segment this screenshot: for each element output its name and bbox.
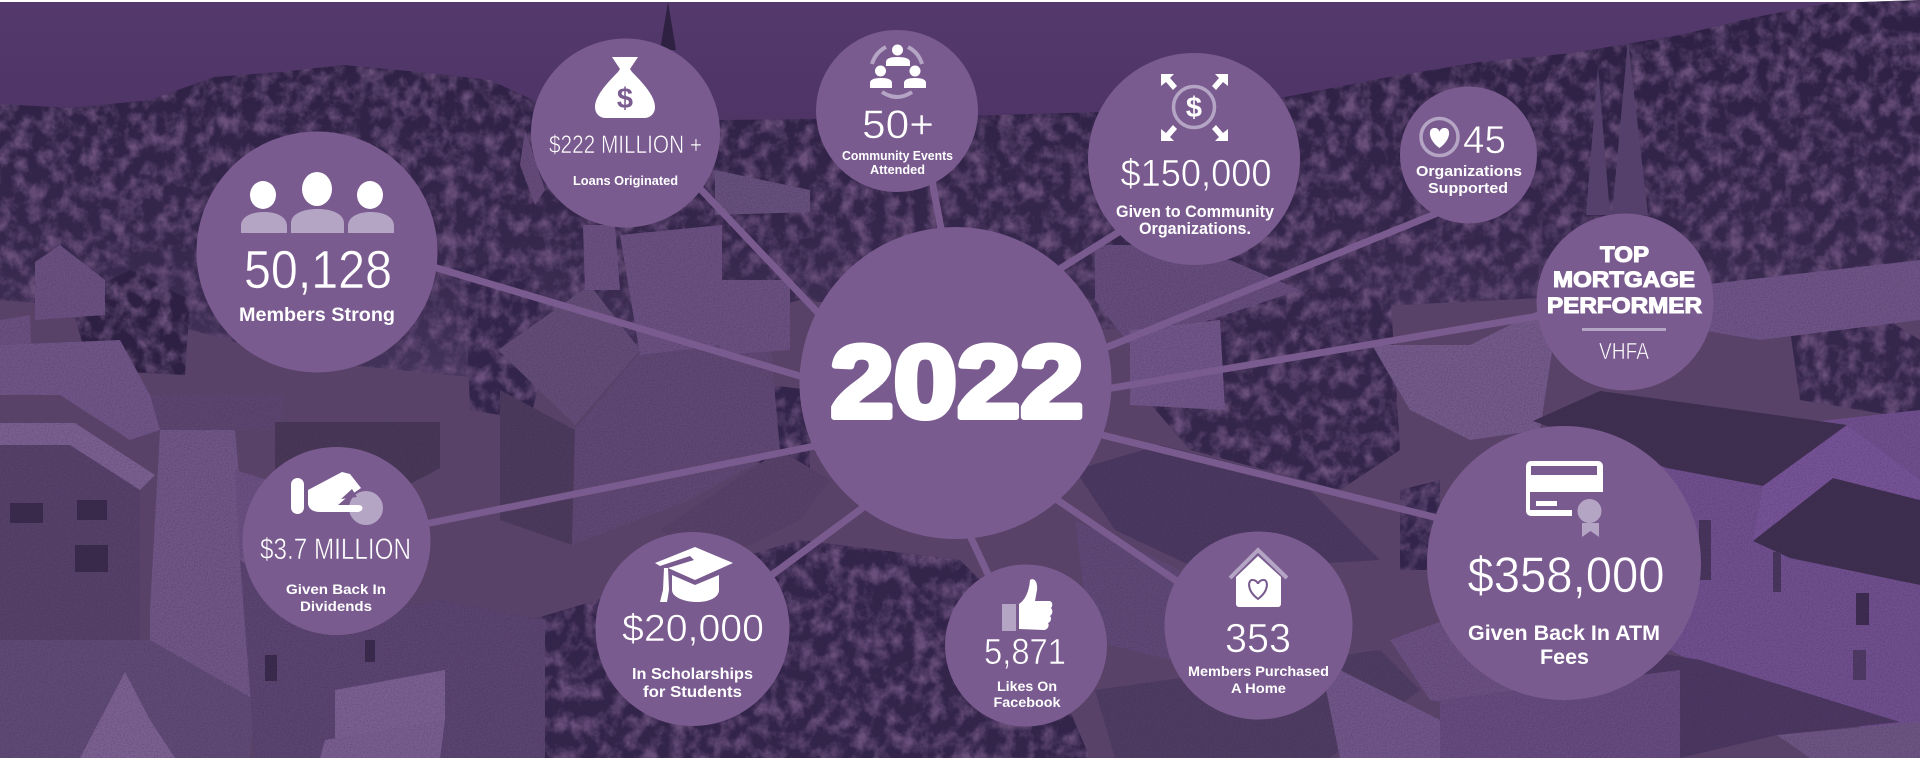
stat: given back in ATM fees [1427,426,1701,700]
icon: dollar with arrows: $ [1186,92,1202,124]
icon: heart ring [1421,118,1458,156]
stat: loans originated: Loans Originated [573,173,678,188]
stat: top mortgage performer: VHFA [1599,338,1650,364]
center circle: 2022 [800,227,1112,539]
stat: community events: Community Events [842,148,953,163]
stat: given back in ATM fees: Fees [1540,645,1589,669]
right spires [1586,67,1610,215]
stat: organizations supported: Supported [1428,180,1508,197]
stat: likes on facebook [945,564,1107,726]
center circle: 2022: 2022 [830,325,1084,439]
center right buildings [1075,245,1920,758]
stat: community events [816,30,978,192]
stat: given to community: $150,000 [1120,153,1272,195]
icon: community group [870,44,926,97]
icon: money bag [595,57,655,118]
stat: loans originated: $222 MILLION + [549,131,702,159]
icon: money bag: $ [617,83,633,115]
stat: dividends [242,447,430,635]
icon: house with heart [1230,550,1287,607]
stat: organizations supported: Organizations [1416,163,1522,180]
stat: given to community: Given to Community [1116,203,1275,221]
stat: likes on facebook: Likes On [997,678,1057,694]
icon: graduation cap [655,547,733,602]
stat: given back in ATM fees: $358,000 [1468,547,1664,603]
stat: likes on facebook: 5,871 [984,631,1066,672]
stat: members strong [196,132,438,372]
stat: given back in ATM fees: Given Back In ATM [1468,621,1660,645]
distant steeple [660,2,676,50]
stat: members purchased a home: A Home [1231,680,1286,696]
left buildings [0,245,545,758]
stat: top mortgage performer: PERFORMER [1547,293,1702,318]
stat: members strong: 50,128 [244,240,392,300]
stat: top mortgage performer [1536,214,1714,390]
stat: community events: Attended [870,162,925,177]
stat: scholarships: $20,000 [622,608,764,650]
connector lines [415,170,1550,590]
stat: scholarships: In Scholarships [632,666,753,683]
stat: members purchased a home: 353 [1225,615,1291,661]
stat: members strong: Members Strong [239,305,395,326]
stat: given to community [1088,53,1300,265]
icon: hand and coin [291,472,383,525]
stat: members purchased a home [1164,532,1352,720]
stat: scholarships: for Students [643,684,742,701]
stat: organizations supported: 45 [1463,119,1506,162]
icon: dollar with arrows [1161,74,1228,141]
stat: community events: 50+ [862,103,934,147]
stat: dividends: Given Back In [286,581,386,597]
right church [1440,391,1920,758]
stat: dividends: Dividends [300,598,372,614]
stat: loans originated [531,38,720,228]
stat: given to community: Organizations. [1139,220,1251,238]
stat: dividends: $3.7 MILLION [260,533,411,566]
stat: organizations supported [1400,86,1537,224]
stat: scholarships [596,532,790,726]
stat: members purchased a home: Members Purchased [1188,663,1329,679]
church [498,130,830,560]
icon: card with medal [1526,461,1603,537]
stat: top mortgage performer: MORTGAGE [1553,267,1695,292]
icon: thumbs up [1002,579,1052,631]
stat: top mortgage performer: TOP [1600,242,1649,267]
stat: likes on facebook: Facebook [994,694,1061,710]
icon: three people [241,172,394,233]
